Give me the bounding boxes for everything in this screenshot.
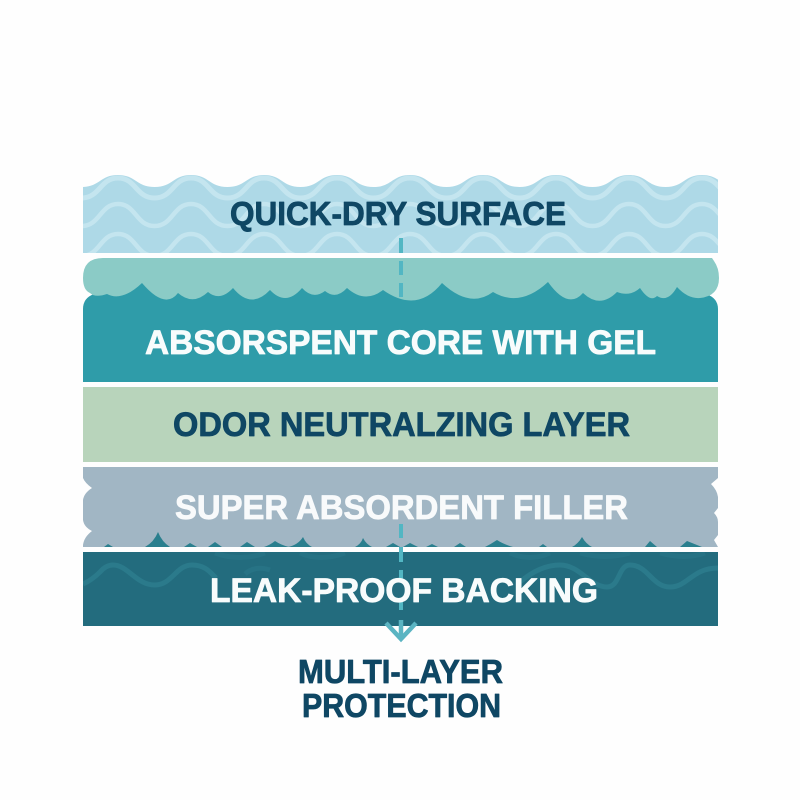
spikes: dark teal peaks along filler base bbox=[104, 532, 702, 547]
heading: absorbent core: ABSORSPENT CORE WITH GEL bbox=[145, 324, 656, 362]
layer: quick-dry surface bbox=[82, 175, 738, 256]
caption: multi-layer protection bbox=[298, 653, 503, 724]
layer: leak-proof backing bbox=[83, 552, 718, 626]
arrow head bbox=[386, 620, 416, 639]
layer: scalloped transition bbox=[83, 258, 719, 301]
dashed centre line bbox=[399, 238, 403, 610]
layer: odor neutralizing bbox=[83, 387, 718, 462]
heading: super absorbent filler: SUPER ABSORDENT FILLER bbox=[175, 489, 628, 527]
heading: leak-proof backing: LEAK-PROOF BACKING bbox=[210, 572, 598, 610]
layer: super absorbent filler bbox=[83, 467, 718, 547]
layer: absorbent core with gel bbox=[83, 278, 718, 382]
caption: multi-layer protection: MULTI-LAYER bbox=[298, 653, 503, 690]
caption: multi-layer protection: PROTECTION bbox=[302, 687, 501, 724]
heading: odor neutralizing: ODOR NEUTRALZING LAYER bbox=[173, 406, 630, 444]
heading: quick-dry surface: QUICK-DRY SURFACE bbox=[230, 195, 566, 232]
